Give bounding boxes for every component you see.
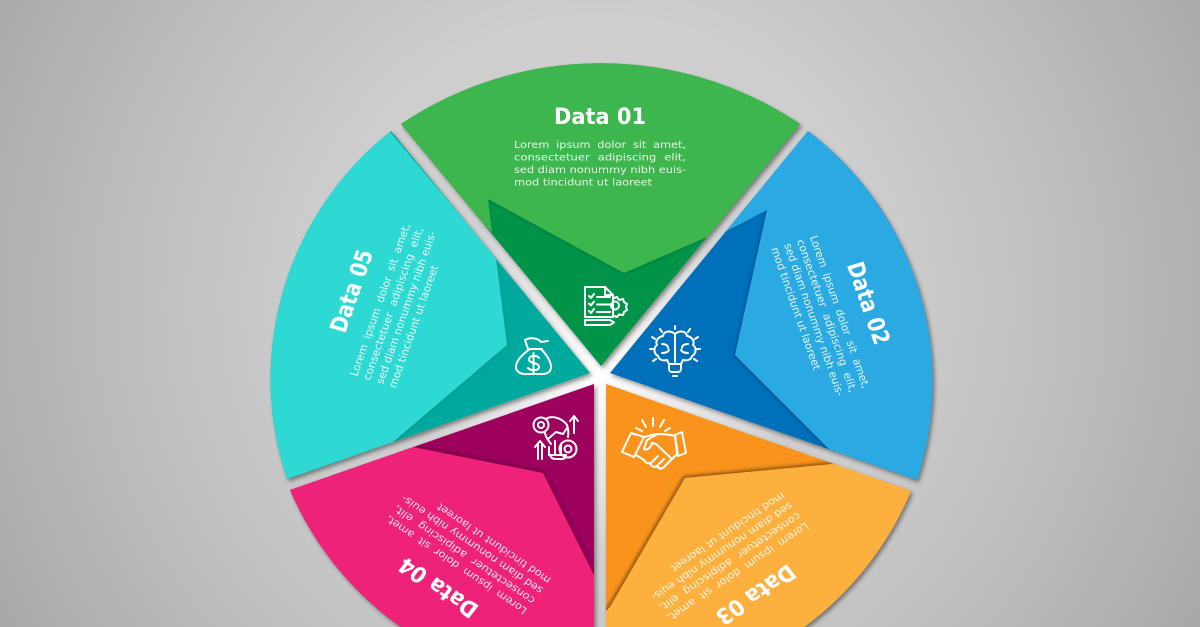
body text: consectetuer adipiscing elit, [656, 510, 803, 613]
wedge: orange base [606, 384, 911, 627]
body text: Lorem ipsum dolor sit amet, [383, 513, 530, 616]
icon: checklist with gear [585, 287, 627, 325]
body text: Lorem ipsum dolor sit amet, [664, 520, 811, 623]
icon: growth chart with gears [534, 416, 578, 459]
body text: consectetuer adipiscing elit, [391, 503, 538, 606]
body text: Lorem ipsum dolor sit amet, [514, 139, 686, 151]
body text: mod tincidunt ut laoreet [768, 246, 823, 371]
wedge: pink light layer [270, 447, 594, 627]
body text [348, 222, 452, 390]
body text [383, 482, 553, 616]
body text: mod tincidunt ut laoreet [514, 177, 652, 189]
heading: Data 04: Data 04 [394, 552, 484, 622]
body text: consectetuer adipiscing elit, [794, 238, 859, 394]
body text: sed diam nonummy nibh euis- [374, 230, 439, 386]
body text: sed diam nonummy nibh euis- [399, 492, 546, 596]
panel: Data 04 [270, 384, 594, 627]
heading: Data 05: Data 05 [325, 247, 379, 336]
heading: Data 02 [768, 223, 907, 402]
body text [640, 489, 811, 623]
body text: consectetuer adipiscing elit, [514, 152, 686, 163]
body text: mod tincidunt ut laoreet [435, 501, 553, 586]
heading: Data 04 [361, 482, 553, 627]
wedge: magenta base [290, 384, 594, 627]
body text [514, 139, 686, 189]
body text: consectetuer adipiscing elit, [361, 226, 426, 382]
wedge: teal light layer [270, 132, 508, 479]
icon: handshake [622, 418, 686, 469]
body text [768, 234, 872, 402]
wedge: blue light layer [726, 131, 933, 480]
body text: sed diam nonummy nibh euis- [514, 165, 686, 176]
infographic: five-segment pie [270, 63, 938, 627]
heading: Data 02: Data 02 [841, 259, 895, 348]
centre glow [410, 186, 790, 566]
icon: light bulb brain [650, 326, 700, 376]
heading: Data 01: Data 01 [554, 105, 646, 130]
body text: mod tincidunt ut laoreet [668, 489, 787, 574]
wedge: orange light layer [600, 464, 930, 627]
heading: Data 05 [313, 211, 452, 390]
wedge: green base [401, 63, 800, 366]
panel: Data 02 [610, 131, 938, 484]
icon: money bag [516, 338, 551, 374]
wedge: dark teal base [271, 131, 590, 479]
panel: Data 03 [600, 384, 930, 627]
body text: Lorem ipsum dolor sit amet, [807, 234, 872, 390]
body text: mod tincidunt ut laoreet [387, 264, 441, 390]
heading: Data 01 [514, 105, 686, 189]
panel: Data 01 [401, 63, 804, 370]
body text: sed diam nonummy nibh euis- [648, 499, 795, 603]
body text: sed diam nonummy nibh euis- [781, 242, 846, 398]
body text: Lorem ipsum dolor sit amet, [348, 222, 413, 378]
wedge: green light layer [401, 63, 800, 274]
heading: Data 03 [640, 489, 833, 627]
wedge: blue base [610, 131, 933, 480]
panel: Data 05 [270, 131, 594, 484]
